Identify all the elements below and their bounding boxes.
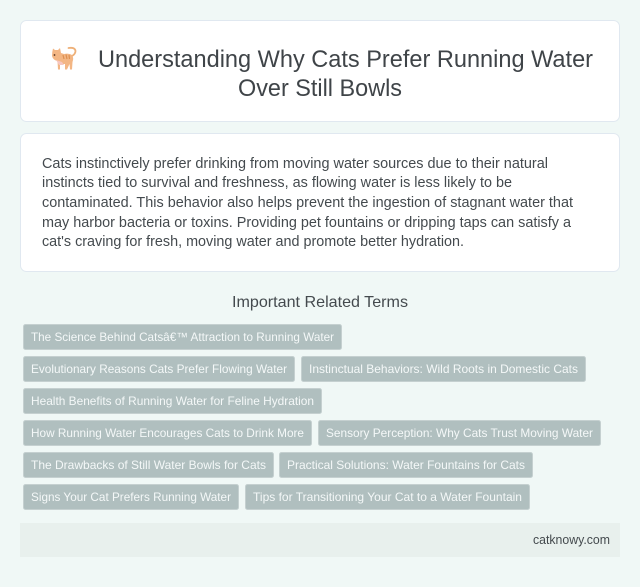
tag: Instinctual Behaviors: Wild Roots in Domestic Cats [309,362,578,376]
tag: How Running Water Encourages Cats to Drink More [31,426,304,440]
tag [24,484,238,510]
tag: The Science Behind Catsâ€™ Attraction to Running Water [31,330,334,344]
tag [24,324,342,350]
tag list [24,324,600,510]
footer source text: catknowy.com [533,532,610,547]
tag: Practical Solutions: Water Fountains for Cats [287,458,525,472]
paragraph text [42,156,573,250]
tag: Evolutionary Reasons Cats Prefer Flowing Water [31,362,287,376]
tag: Health Benefits of Running Water for Feline Hydration [31,394,314,408]
paragraph text: cat's craving for fresh, moving water and promote better hydration. [42,234,464,250]
title line 2: Over Still Bowls [238,75,402,102]
paragraph text: instincts tied to survival and freshness, as flowing water is less likely to be [42,175,512,191]
title line 1: Understanding Why Cats Prefer Running Water [98,46,593,73]
paragraph text: Cats instinctively prefer drinking from moving water sources due to their natural [42,156,548,172]
paragraph text: contaminated. This behavior also helps prevent the ingestion of stagnant water that [42,195,573,211]
tag [318,420,600,446]
tag [280,452,532,478]
tag [302,356,586,382]
footer [20,523,620,557]
panel: description [20,134,620,272]
tag [246,484,530,510]
tag: Signs Your Cat Prefers Running Water [31,490,231,504]
icon: cat [52,48,76,70]
tag [24,420,312,446]
panel: title card [20,20,620,122]
tag: The Drawbacks of Still Water Bowls for Cats [31,458,266,472]
paragraph text: may harbor bacteria or toxins. Providing pet fountains or dripping taps can satisfy a [42,215,572,231]
heading: related terms: Important Related Terms [232,294,408,311]
tag [24,388,322,414]
tag [24,452,274,478]
tag: Tips for Transitioning Your Cat to a Water Fountain [253,490,522,504]
tag [24,356,294,382]
tag: Sensory Perception: Why Cats Trust Moving Water [326,426,593,440]
